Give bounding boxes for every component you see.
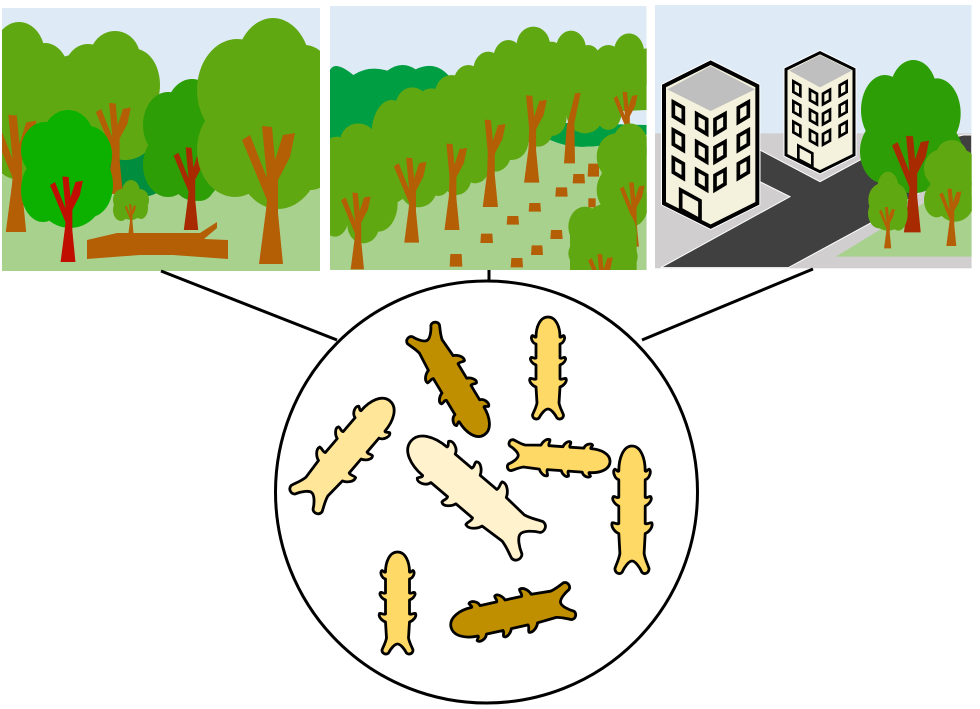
connector lines [161,269,813,340]
fallen log [87,222,228,259]
sky [655,5,972,134]
tree: small left [868,172,908,248]
tree: sapling [113,180,149,233]
near bush upper right [597,123,648,247]
panel: urban [655,5,978,268]
ground [2,175,320,271]
tree stumps [450,164,599,267]
row trunks [341,92,638,269]
pavement [655,133,972,268]
tree: dark green [143,79,223,230]
magnifying circle [276,281,698,703]
panel: intact forest [0,8,340,271]
distant teal foliage [110,152,156,196]
distant dark foliage [330,65,647,147]
termite: yellow right [612,446,652,574]
termite: yellow bottom [379,552,416,654]
termite: yellow horizontal [507,437,611,480]
termite: brown bottom [446,578,577,649]
tree: large right [197,18,320,264]
sky [2,8,320,175]
lawn [836,202,972,257]
termite: brown top [402,319,503,446]
termite: pale left [285,385,408,518]
termites [285,317,652,654]
termite: cream centre [392,419,551,566]
tree: left [0,22,70,232]
tree: back centre [64,31,160,194]
termite: yellow top [530,317,566,419]
road [661,135,972,268]
near bush lower right [568,204,638,270]
ground [330,135,647,270]
panel: logged forest [330,6,647,270]
receding tree canopy row [322,27,660,243]
sky [330,6,646,144]
large building [664,63,757,227]
tree: bright green with red trunk [21,110,113,262]
tree: dark green with red trunk [860,60,963,232]
tree: small right [924,140,972,246]
small building [786,53,854,172]
